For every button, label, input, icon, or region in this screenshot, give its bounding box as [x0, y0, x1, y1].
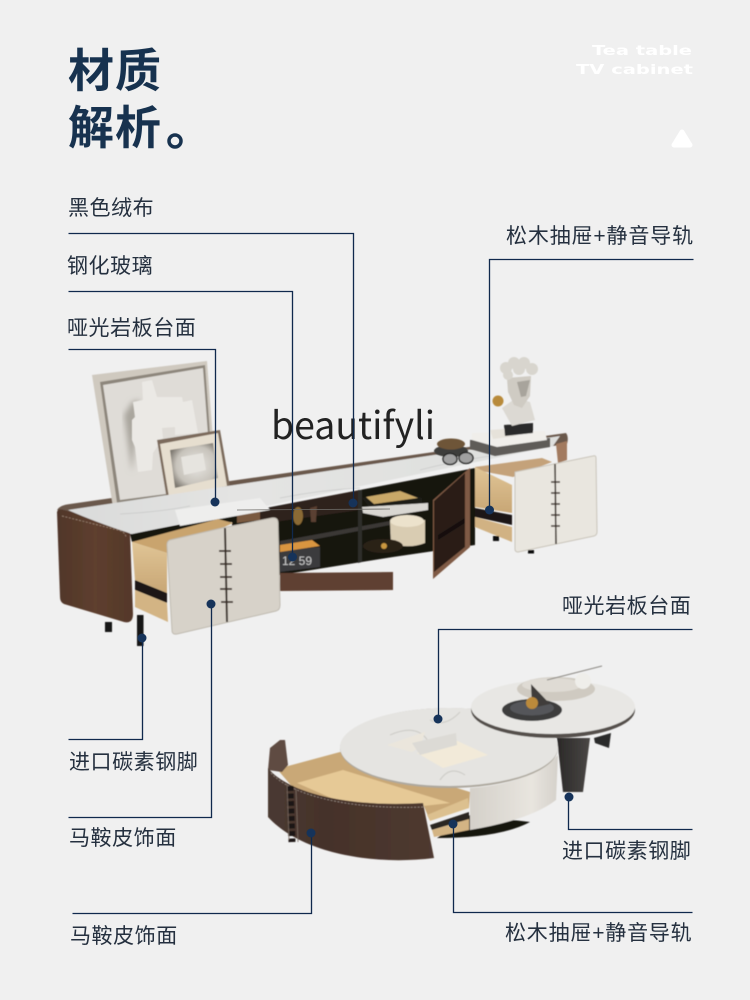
- small marble top: [471, 680, 635, 734]
- wall art frame: [92, 361, 217, 507]
- callout: matte slate top, cabinet: 哑光岩板台面: [67, 317, 196, 340]
- left drawer: [105, 518, 280, 646]
- english subtitle: TV cabinet: [576, 63, 693, 78]
- wooden drawer interior: [277, 752, 470, 837]
- shelf ornaments: [293, 506, 403, 553]
- open glass door: [433, 468, 470, 579]
- center dark shelves: [130, 468, 475, 575]
- brown drawer front: [268, 740, 434, 860]
- english subtitle: Tea table: [592, 44, 692, 59]
- right drawer: [475, 456, 597, 554]
- black plate and gold ball: [502, 684, 562, 721]
- small table leg back: [594, 733, 611, 748]
- tv cabinet: [57, 361, 597, 646]
- callout: tempered glass: 钢化玻璃: [67, 255, 153, 278]
- callout: carbon steel feet, cabinet: 进口碳素钢脚: [69, 751, 198, 774]
- small picture frame: [157, 430, 230, 500]
- small top book: [490, 428, 516, 439]
- callout: saddle leather, coffee table: [70, 828, 316, 948]
- bust base: [504, 423, 533, 436]
- shelf decor books: [362, 490, 428, 517]
- left end stitching: [62, 516, 126, 538]
- marble top: [68, 436, 560, 534]
- icon: white triangle: [674, 132, 690, 145]
- candle drum: [390, 515, 425, 546]
- callout: matte slate top, coffee table: [434, 595, 692, 724]
- dark stacked books: [470, 438, 550, 456]
- callout: carbon steel feet, coffee table: 进口碳素钢脚: [562, 840, 691, 863]
- small table underside: [471, 682, 635, 738]
- callout: saddle leather, cabinet: [68, 600, 216, 850]
- callout: pine drawer, cabinet: 松木抽屉+静音导轨: [506, 225, 694, 248]
- bust face shadow: [517, 380, 530, 397]
- sunglasses and bowl: [434, 438, 473, 464]
- white books: [472, 431, 547, 447]
- large marble top: [340, 708, 558, 788]
- bust head: [507, 376, 531, 408]
- bust shoulders: [502, 398, 535, 426]
- black base: [437, 815, 530, 838]
- callout: carbon steel feet, coffee table: [562, 792, 692, 863]
- callout: pine drawer, cabinet: [485, 225, 694, 514]
- callout: carbon steel feet, cabinet: [68, 634, 198, 774]
- title: 材质: [68, 45, 162, 97]
- callout: matte slate top, cabinet: [67, 317, 220, 506]
- title: [68, 45, 181, 154]
- callout: black velvet: [68, 197, 358, 508]
- ceramic tray: [517, 666, 602, 701]
- gold sphere: [492, 396, 504, 406]
- right end leather: [556, 441, 567, 463]
- watermark: beautifyli: [271, 395, 435, 450]
- callout: tempered glass: [67, 255, 297, 562]
- coffee table: [268, 666, 635, 860]
- small table leg front: [557, 738, 590, 792]
- bust hair: [500, 357, 538, 380]
- callout: saddle leather, coffee table: 马鞍皮饰面: [70, 925, 178, 948]
- open magazine: [387, 732, 488, 768]
- shelf reflection line: [237, 509, 390, 510]
- shelf clock: [280, 540, 320, 572]
- english subtitle: [576, 44, 693, 78]
- left end leather panel: [57, 509, 133, 622]
- callout: saddle leather, cabinet: 马鞍皮饰面: [69, 827, 177, 850]
- callout: pine drawer, coffee table: 松木抽屉+静音导轨: [505, 922, 692, 945]
- back rim: [57, 433, 568, 514]
- callout: pine drawer, coffee table: [448, 820, 692, 945]
- shelf clock: 12 59: [282, 554, 312, 568]
- callout: black velvet: 黑色绒布: [68, 197, 154, 220]
- title: 解析: [68, 102, 162, 154]
- statue bust and books: [470, 357, 550, 456]
- round table cream body: [470, 755, 558, 830]
- lower leather strip: [280, 572, 393, 591]
- callout: matte slate top, coffee table: 哑光岩板台面: [562, 595, 691, 618]
